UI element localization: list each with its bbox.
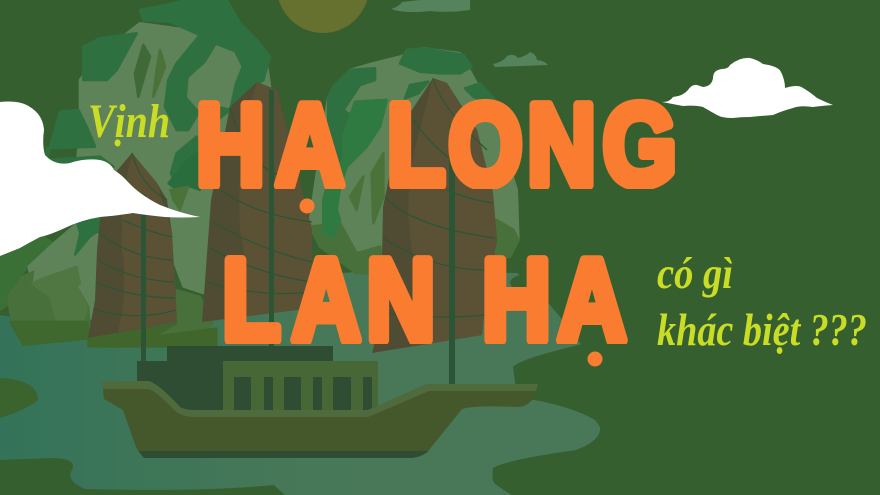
title: HẠ LONG: HẠ LONG — [196, 81, 677, 210]
boat upper deck — [223, 361, 378, 411]
left white cloud — [0, 102, 200, 256]
boat — [102, 346, 538, 458]
lower rock body — [0, 150, 217, 347]
boat rim — [102, 381, 538, 417]
right sail — [372, 78, 497, 353]
sun — [277, 0, 369, 33]
boat cabin — [137, 346, 333, 412]
river bank islet — [510, 275, 552, 300]
label: có gì: có gì — [657, 249, 733, 298]
upper rock body — [47, 0, 270, 250]
left river bank — [0, 378, 38, 418]
small clouds — [391, 0, 548, 67]
boat hull — [102, 381, 538, 458]
boat keel — [139, 451, 429, 458]
right river bank — [493, 300, 640, 495]
title: LAN HẠ: LAN HẠ — [222, 236, 626, 365]
label: Vịnh: Vịnh — [88, 95, 170, 148]
water — [0, 270, 600, 495]
right white cloud — [662, 58, 833, 118]
right karst rock — [310, 48, 518, 273]
masts — [141, 90, 455, 385]
centre sail — [202, 82, 312, 322]
boat windows — [234, 377, 372, 410]
left sail — [88, 153, 177, 338]
left karst rock — [0, 0, 270, 347]
